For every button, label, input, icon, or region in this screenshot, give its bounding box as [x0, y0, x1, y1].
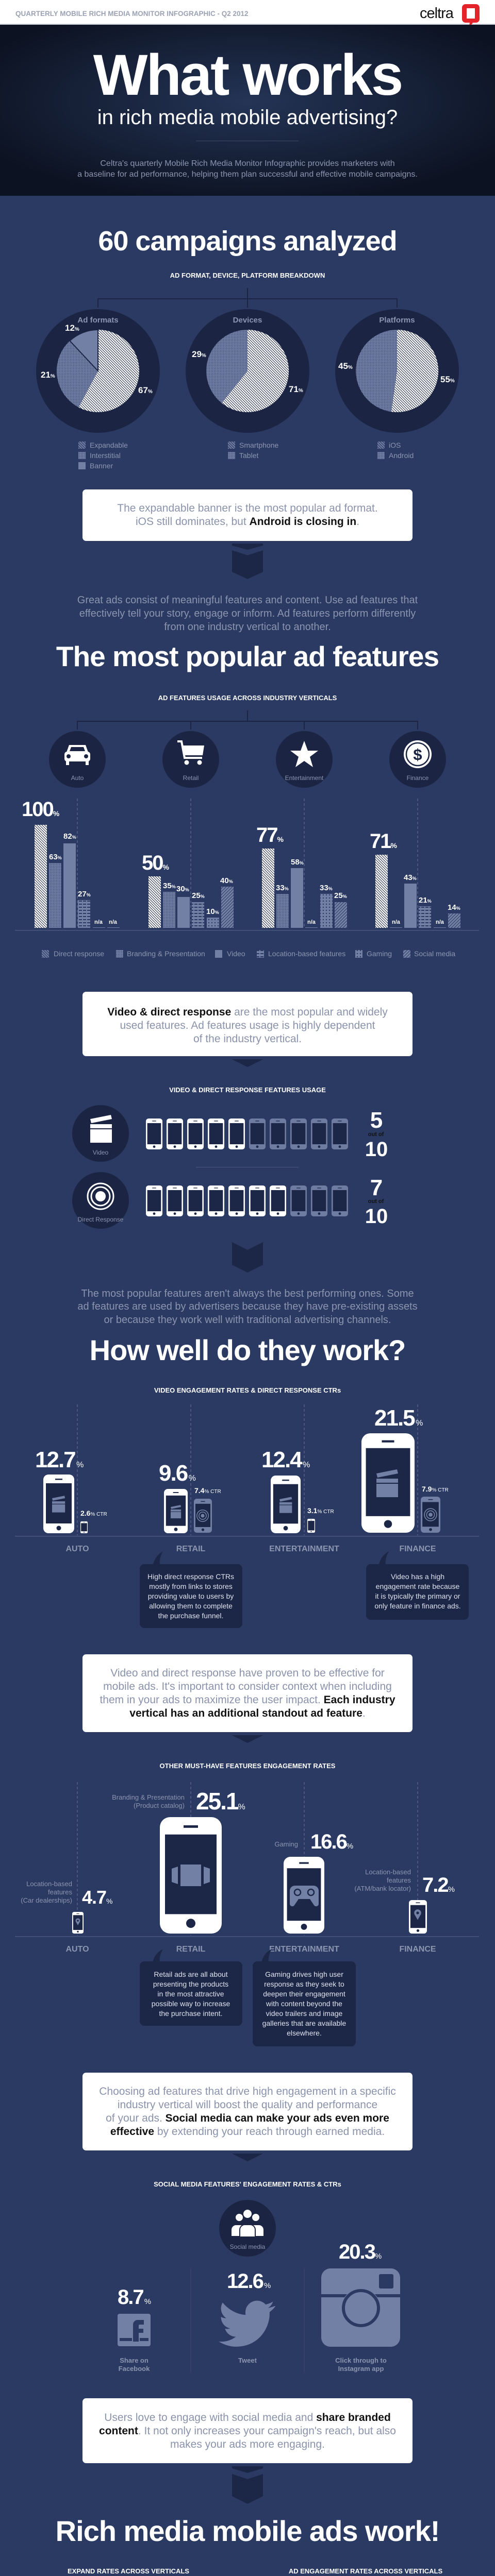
- must-have features chart: [15, 1788, 479, 1937]
- pie: devices: [186, 309, 309, 433]
- title: What works: [93, 43, 402, 107]
- social: facebook: Share on: [120, 2357, 148, 2364]
- vertical labels 2: FINANCE: [399, 1945, 436, 1954]
- pie: platforms: 55%: [440, 375, 455, 384]
- bar chart legend: Gaming: [367, 950, 392, 958]
- bar chart: ad features usage: 33%: [276, 884, 289, 892]
- pie legends: Interstitial: [90, 451, 121, 460]
- intro text: a baseline for ad performance, helping them plan successful and effective mobile campaigns.: [77, 170, 418, 179]
- bar chart: ad features usage: 43%: [404, 873, 417, 882]
- bubble: retail branding: [140, 1949, 242, 2026]
- bar chart legend: Social media: [414, 950, 455, 958]
- bubble: gaming: elsewhere.: [287, 2029, 322, 2037]
- bar chart legend: Video: [227, 950, 245, 958]
- usage row: direct response: out of: [368, 1198, 384, 1205]
- bubble: finance video: only feature in finance ads.: [374, 1602, 461, 1610]
- entertainment: [262, 849, 274, 928]
- intro text: [77, 159, 418, 179]
- bubble: retail CTR: mostly from links to stores: [149, 1582, 233, 1590]
- paragraph: popular not best: [77, 1288, 418, 1326]
- must-have features chart: Gaming: [274, 1840, 298, 1848]
- subheading: breakdown: AD FORMAT, DEVICE, PLATFORM BREAKDOWN: [170, 272, 325, 279]
- logo: celtra: [420, 4, 480, 29]
- entertainment: 12.4 %: [261, 1447, 310, 1472]
- callout 1: iOS still dominates, but Android is closing in.: [136, 516, 359, 528]
- bar chart: ad features usage: 14%: [448, 903, 460, 912]
- bubble: finance video: [366, 1551, 469, 1620]
- must-have features chart: 25.1%: [196, 1788, 245, 1815]
- bubble: retail CTR: allowing them to complete: [149, 1602, 233, 1610]
- heading: 60 campaigns analyzed: 60 campaigns analyzed: [98, 226, 397, 257]
- heading: how well: How well do they work?: [90, 1334, 405, 1366]
- social: instagram: Click through to: [335, 2357, 387, 2364]
- callout 3: mobile ads. It's important to consider context when including: [103, 1681, 392, 1692]
- bar chart: ad features usage: n/a: [436, 919, 444, 925]
- pie legends: Banner: [90, 462, 113, 470]
- vertical icons: Retail: [183, 774, 199, 782]
- vertical labels 1: RETAIL: [176, 1545, 206, 1553]
- subtitle: in rich media mobile advertising?: [97, 106, 398, 129]
- bar chart: ad features usage: 100%: [22, 798, 60, 821]
- subheading: usage across verticals: AD FEATURES USAGE ACROSS INDUSTRY VERTICALS: [158, 694, 337, 702]
- social: facebook: Facebook: [119, 2365, 150, 2372]
- subheading: expand rates: EXPAND RATES ACROSS VERTICALS: [68, 2567, 189, 2575]
- callout 3: them in your ads to maximize the user impact. Each industry: [100, 1694, 395, 1706]
- bubble: retail branding: presenting the products: [153, 1980, 228, 1988]
- usage row: direct response: Direct Response: [78, 1216, 124, 1223]
- icon: social media circle: Social media: [230, 2243, 266, 2250]
- finance: 21.5 %: [374, 1405, 423, 1431]
- subheading: other must-have: OTHER MUST-HAVE FEATURES ENGAGEMENT RATES: [160, 1762, 336, 1770]
- pie: platforms: 45%: [338, 361, 353, 371]
- callout 3: Video and direct response have proven to be effective for: [110, 1667, 385, 1679]
- bar chart: ad features usage: 82%: [63, 832, 76, 841]
- must-have features chart: (ATM/bank locator): [354, 1885, 411, 1892]
- bar chart legend: [42, 950, 455, 958]
- usage row: direct response: [72, 1172, 388, 1229]
- pie: platforms: Platforms: [379, 316, 415, 325]
- callout 4: of your ads. Social media can make your ads even more: [106, 2112, 389, 2124]
- bubble: finance video: engagement rate because: [376, 1582, 460, 1590]
- arrow 2: [232, 1059, 263, 1067]
- vertical labels 1: ENTERTAINMENT: [269, 1545, 339, 1553]
- bubble: gaming: video trailers and image: [266, 2009, 343, 2018]
- pie: ad formats: 12%: [65, 323, 79, 333]
- retail: 9.6 %: [159, 1461, 196, 1486]
- hero panel: [0, 25, 495, 196]
- bar chart legend: Location-based features: [268, 950, 345, 958]
- finance location: [409, 1900, 427, 1934]
- callout 5: Users love to engage with social media and share branded: [104, 2412, 391, 2424]
- social: facebook: 8.7 %: [118, 2286, 151, 2309]
- pie: devices: 71%: [289, 384, 303, 394]
- social: twitter: [219, 2270, 275, 2364]
- subheading: video engagement: VIDEO ENGAGEMENT RATES & DIRECT RESPONSE CTRs: [154, 1386, 341, 1394]
- paragraph: popular not best: ad features are used by advertisers because they have pre-existing assets: [77, 1301, 418, 1312]
- bubble: retail CTR: providing value to users by: [148, 1592, 234, 1600]
- social: instagram: [321, 2241, 400, 2372]
- retail branding: [160, 1817, 222, 1934]
- pie legends: Tablet: [239, 451, 258, 460]
- intro text: Celtra's quarterly Mobile Rich Media Monitor Infographic provides marketers with: [100, 159, 395, 168]
- callout 4: industry vertical will boost the quality and performance: [118, 2099, 377, 2111]
- usage row: direct response: 10: [365, 1205, 388, 1228]
- video engagement chart: 7.4% CTR: [194, 1486, 221, 1495]
- bubble: retail CTR: [140, 1551, 242, 1628]
- usage row: video: 10: [365, 1138, 388, 1161]
- bar chart: ad features usage: 40%: [220, 876, 233, 885]
- vertical labels 1: FINANCE: [399, 1545, 436, 1553]
- bubble: gaming: galleries that are available: [262, 2019, 346, 2027]
- bubble: retail branding: in the most attractive: [157, 1990, 224, 1998]
- icon: social media circle: [219, 2200, 276, 2257]
- callout 2: of the industry vertical.: [193, 1033, 302, 1045]
- callout 1: [82, 489, 412, 541]
- bar chart: ad features usage: 33%: [320, 884, 333, 892]
- arrow 3: [232, 1242, 263, 1273]
- vertical labels 2: RETAIL: [176, 1945, 206, 1954]
- bubble: gaming: deepen their engagement: [263, 1990, 345, 1998]
- vertical labels 2: AUTO: [65, 1945, 89, 1954]
- social: facebook: [118, 2286, 151, 2372]
- social: twitter: Tweet: [238, 2357, 257, 2364]
- pie legends: [78, 441, 414, 470]
- bubble: retail branding: the purchase intent.: [159, 2009, 222, 2018]
- must-have features chart: 7.2%: [422, 1874, 455, 1896]
- bar chart: ad features usage: n/a: [109, 919, 118, 925]
- bar chart: ad features usage: 77%: [256, 824, 284, 846]
- auto location: [72, 1912, 84, 1934]
- usage row: video: out of: [368, 1131, 384, 1138]
- callout 5: [82, 2398, 412, 2463]
- heading: most popular ad features: The most popular ad features: [56, 640, 439, 672]
- vertical labels 1: [65, 1545, 436, 1553]
- bar chart: ad features usage: 25%: [334, 891, 347, 900]
- bar chart: ad features usage: 27%: [78, 890, 91, 899]
- arrow 6: [232, 2466, 263, 2504]
- must-have features chart: features: [48, 1888, 72, 1896]
- bar chart: ad features usage: 63%: [49, 853, 62, 861]
- vertical labels 1: AUTO: [65, 1545, 89, 1553]
- must-have features chart: (Product catalog): [134, 1802, 185, 1809]
- bar chart: ad features usage: 58%: [291, 858, 304, 867]
- arrow 1: [232, 544, 263, 579]
- pie legends: Expandable: [90, 441, 128, 449]
- social: twitter: 12.6 %: [227, 2270, 271, 2293]
- bar chart: ad features usage: n/a: [392, 919, 401, 925]
- bar chart legend: Branding & Presentation: [127, 950, 205, 958]
- callout 3: vertical has an additional standout ad feature.: [129, 1707, 366, 1719]
- pie legends: Smartphone: [239, 441, 278, 449]
- vertical icons: [49, 731, 446, 788]
- vertical icons: Finance: [407, 774, 429, 782]
- bar chart: ad features usage: 35%: [163, 882, 176, 890]
- paragraph: popular not best: or because they work well with traditional advertising channels.: [104, 1314, 391, 1326]
- bar chart: ad features usage: 25%: [192, 891, 205, 900]
- bubble: retail branding: Retail ads are all about: [154, 1970, 228, 1978]
- callout 3: [82, 1654, 412, 1732]
- paragraph: great ads: [77, 595, 418, 633]
- auto: 12.7 %: [35, 1447, 84, 1472]
- bubble: gaming: with content beyond the: [266, 1999, 342, 2008]
- connector: [98, 288, 397, 308]
- subheading: video & direct response usage: VIDEO & DIRECT RESPONSE FEATURES USAGE: [169, 1086, 326, 1094]
- callout 1: The expandable banner is the most popular ad format.: [117, 502, 378, 514]
- pie: ad formats: 21%: [41, 370, 55, 380]
- must-have features chart: 4.7%: [82, 1887, 112, 1908]
- vertical labels 2: [65, 1945, 436, 1954]
- paragraph: popular not best: The most popular features aren't always the best performing ones. Some: [81, 1288, 414, 1299]
- bar chart: ad features usage: 21%: [419, 896, 432, 905]
- header bar: QUARTERLY MOBILE RICH MEDIA MONITOR INFOGRAPHIC - Q2 2012: [15, 10, 249, 18]
- header bar: [0, 0, 495, 25]
- social: instagram: 20.3%: [339, 2241, 382, 2263]
- callout 2: [82, 992, 412, 1056]
- callout 4: effective by extending your reach through earned media.: [110, 2126, 385, 2138]
- callout 5: content. It not only increases your campaign's reach, but also: [99, 2425, 396, 2437]
- pie: ad formats: 67%: [138, 385, 153, 395]
- must-have features chart: Location-based: [365, 1868, 411, 1876]
- pie legends: iOS: [389, 441, 401, 449]
- bubble: gaming: response as they seek to: [264, 1980, 344, 1988]
- bubble: finance video: it is typically the primary or: [375, 1592, 460, 1600]
- subheading: social media: SOCIAL MEDIA FEATURES' ENGAGEMENT RATES & CTRs: [154, 2180, 341, 2188]
- pie: ad formats: Ad formats: [77, 316, 119, 325]
- bubble: retail branding: possible way to increase: [152, 1999, 230, 2008]
- bar chart: ad features usage: n/a: [307, 919, 316, 925]
- subheading: engagement rates: AD ENGAGEMENT RATES ACROSS VERTICALS: [289, 2567, 442, 2575]
- social: instagram: Instagram app: [338, 2365, 384, 2372]
- entertainment gaming: [284, 1857, 324, 1934]
- paragraph: great ads: from one industry vertical to another.: [164, 621, 331, 633]
- bar chart: ad features usage: 71%: [370, 830, 397, 853]
- finance: [375, 855, 388, 928]
- pie: ad formats: [36, 309, 160, 433]
- pie: platforms: [335, 309, 459, 433]
- callout 4: Choosing ad features that drive high engagement in a specific: [99, 2086, 396, 2097]
- must-have features chart: features: [387, 1876, 411, 1884]
- paragraph: great ads: Great ads consist of meaningful features and content. Use ad features that: [77, 595, 418, 606]
- video engagement chart: [15, 1405, 479, 1536]
- must-have features chart: Branding & Presentation: [112, 1793, 185, 1801]
- bar chart: ad features usage: [15, 798, 479, 930]
- bar chart legend: Direct response: [54, 950, 104, 958]
- bar chart: ad features usage: 30%: [176, 885, 189, 893]
- usage row: video: Video: [93, 1149, 109, 1156]
- video engagement chart: 3.1% CTR: [307, 1506, 334, 1515]
- bar chart: ad features usage: n/a: [94, 919, 103, 925]
- must-have features chart: Location-based: [26, 1880, 72, 1888]
- usage row: video: [72, 1105, 388, 1162]
- usage row: direct response: 7: [370, 1175, 383, 1200]
- paragraph: great ads: effectively tell your story, engage or inform. Ad features perform differently: [79, 608, 416, 619]
- vertical icons: Entertainment: [285, 774, 324, 782]
- pie: devices: 29%: [192, 349, 206, 359]
- must-have features chart: 16.6%: [310, 1831, 353, 1853]
- vertical labels 2: ENTERTAINMENT: [269, 1945, 339, 1954]
- pie: devices: Devices: [233, 316, 262, 325]
- callout 5: makes your ads more engaging.: [170, 2438, 325, 2450]
- bubble: gaming: [253, 1949, 356, 2046]
- arrow 5: [232, 2154, 263, 2161]
- bar chart: ad features usage: 10%: [206, 907, 219, 916]
- callout 2: used features. Ad features usage is highly dependent: [120, 1020, 375, 1031]
- callout 2: Video & direct response are the most popular and widely: [107, 1006, 388, 1018]
- logo: celtra: celtra: [420, 5, 454, 22]
- bubble: gaming: Gaming drives high user: [265, 1970, 343, 1978]
- video engagement chart: 2.6% CTR: [80, 1509, 107, 1517]
- heading: rich media works: Rich media mobile ads work!: [56, 2515, 439, 2547]
- bubble: retail CTR: High direct response CTRs: [147, 1572, 234, 1581]
- bubble: retail CTR: the purchase funnel.: [158, 1612, 223, 1620]
- pie legends: Android: [389, 451, 414, 460]
- bubble: finance video: Video has a high: [391, 1572, 444, 1581]
- retail: [148, 876, 161, 928]
- arrow 4: [232, 1735, 263, 1743]
- callout 4: [82, 2073, 412, 2150]
- bar chart: ad features usage: 50%: [142, 852, 169, 874]
- must-have features chart: (Car dealerships): [21, 1896, 72, 1904]
- vertical icons: Auto: [71, 774, 84, 782]
- auto: [35, 825, 47, 928]
- usage row: video: 5: [370, 1108, 383, 1133]
- video engagement chart: 7.9% CTR: [422, 1485, 449, 1493]
